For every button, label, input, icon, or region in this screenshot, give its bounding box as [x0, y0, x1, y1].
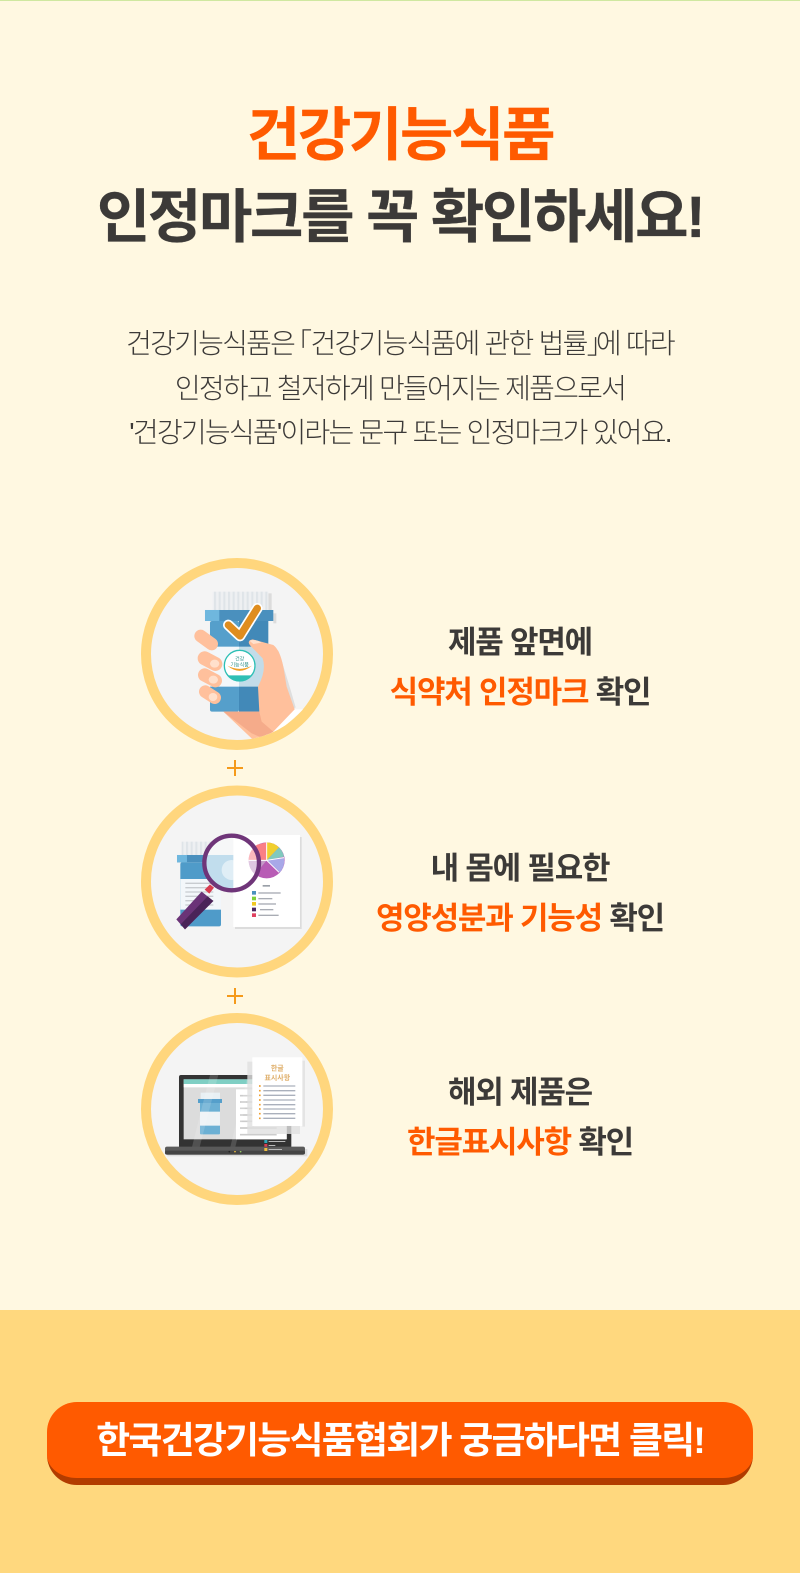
top accent line [0, 0, 800, 1]
icon: bottle with hand and check mark: 건강 [235, 656, 245, 663]
step 1 text [390, 625, 650, 710]
title [97, 103, 703, 250]
call-to-action button: 한국건강기능식품협회가 궁금하다면 클릭! [96, 1420, 704, 1461]
step 1 text: 제품 앞면에 [448, 625, 592, 660]
step 1 text: 식약처 인정마크 확인 [390, 675, 650, 710]
icon: magnifier, bottle and chart report [146, 790, 328, 972]
icon: bottle with hand and check mark [146, 563, 328, 745]
description text [126, 328, 675, 448]
description text: '건강기능식품'이라는 문구 또는 인정마크가 있어요. [129, 417, 671, 448]
icon: plus sign [227, 988, 243, 1004]
icon: bottle with hand and check mark: 기능식품 [230, 661, 249, 668]
step 2 text: 영양성분과 기능성 확인 [376, 901, 664, 936]
step 3 text [407, 1075, 633, 1160]
title: 건강기능식품 [247, 103, 553, 168]
illustrations column [141, 558, 333, 1205]
step 3 text: 해외 제품은 [448, 1075, 592, 1110]
icon: laptop with Korean label document [146, 1018, 328, 1200]
call-to-action button [47, 1402, 753, 1485]
step 2 text: 내 몸에 필요한 [431, 851, 609, 886]
description text: 인정하고 철저하게 만들어지는 제품으로서 [175, 372, 625, 404]
step 3 text: 한글표시사항 확인 [407, 1125, 633, 1160]
icon: laptop with Korean label document: 한글 [271, 1063, 284, 1072]
icon: plus sign [227, 760, 243, 776]
bottom band [0, 1310, 800, 1573]
icon: laptop with Korean label document: 표시사항 [264, 1073, 291, 1082]
title: 인정마크를 꼭 확인하세요! [97, 185, 703, 250]
description text: 건강기능식품은 「건강기능식품에 관한 법률」에 따라 [126, 328, 674, 359]
step 2 text [376, 851, 664, 936]
